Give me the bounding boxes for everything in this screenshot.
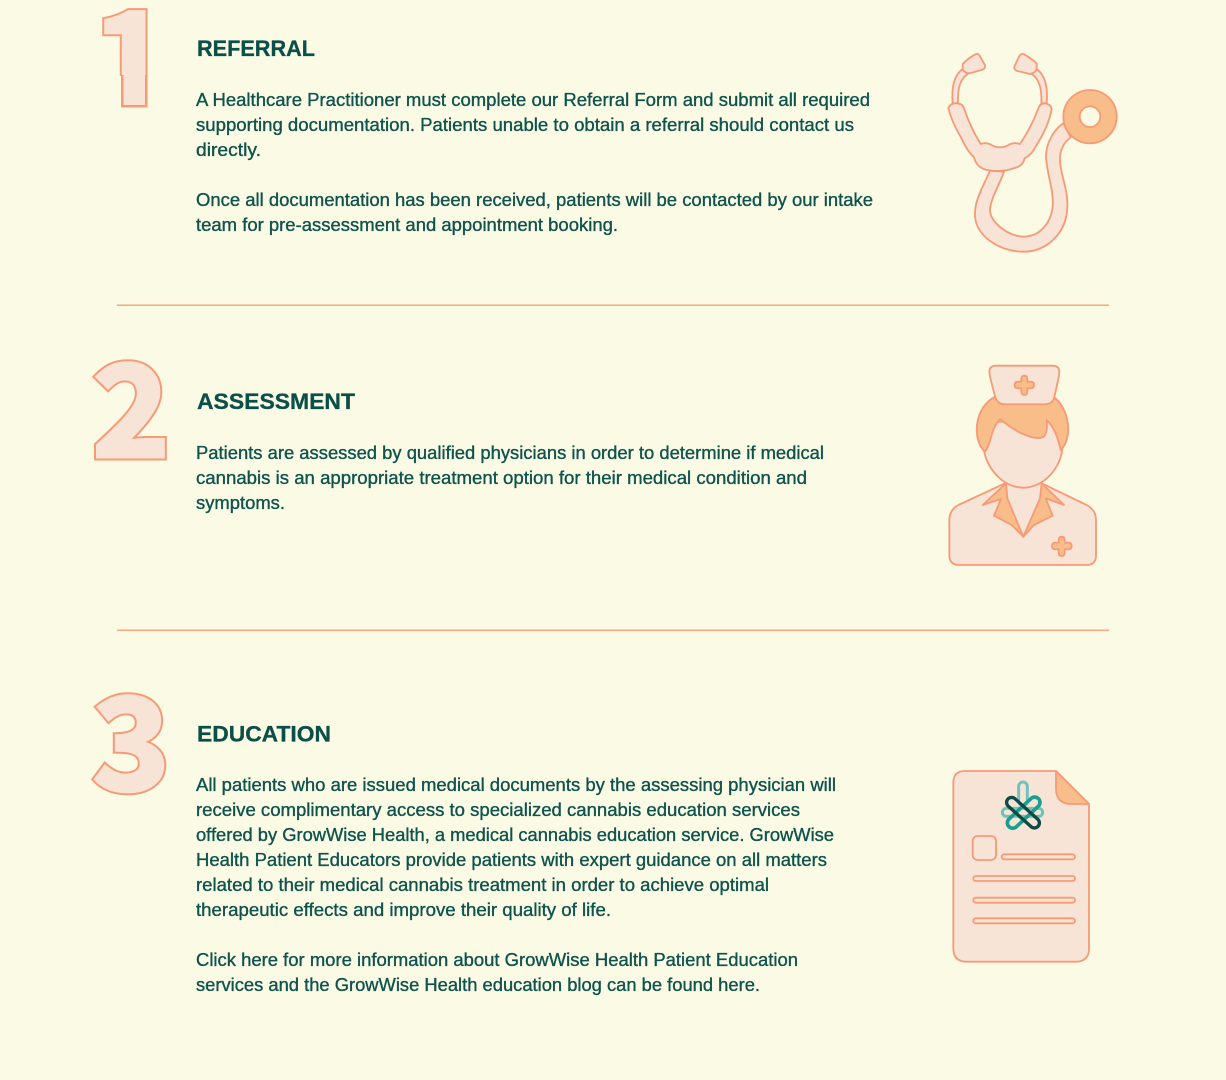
- text block: education description: related to their medical cannabis treatment in order to achieve optimal: [196, 875, 769, 895]
- panel: step 2 assessment: [91, 308, 1096, 565]
- text block: referral description: directly.: [196, 140, 261, 160]
- text block: education description: therapeutic effects and improve their quality of life.: [196, 900, 611, 920]
- text block: assessment description: cannabis is an appropriate treatment option for their medical condition and: [196, 468, 807, 488]
- text block: education description: offered by GrowWise Health, a medical cannabis education service. GrowWise: [196, 825, 834, 845]
- text block: referral description: A Healthcare Practitioner must complete our Referral Form and submit all required: [196, 90, 870, 110]
- logo: GrowWise knot: [1002, 782, 1043, 830]
- panel: step 1 referral: [92, 0, 1117, 252]
- divider 1: [117, 304, 1109, 306]
- icon: nurse: [949, 366, 1096, 565]
- number 2: 2: [91, 308, 171, 496]
- text block: assessment description: [196, 443, 824, 513]
- text block: education description: Click here for more information about GrowWise Health Patient Education: [196, 950, 798, 970]
- text block: assessment description: Patients are assessed by qualified physicians in order to determine if medical: [196, 443, 824, 463]
- text block: referral description: supporting documentation. Patients unable to obtain a referral should contact us: [196, 115, 854, 135]
- text block: referral description: team for pre-assessment and appointment booking.: [196, 215, 618, 235]
- icon: medical document: [953, 771, 1089, 962]
- text block: education description: All patients who are issued medical documents by the assessing physician will: [196, 775, 836, 795]
- text block: referral description: [196, 90, 873, 235]
- divider 2: [117, 630, 1109, 631]
- heading: referral: REFERRAL: [197, 36, 315, 61]
- number 1: [102, 8, 148, 108]
- heading: education: EDUCATION: [197, 722, 331, 746]
- number 3: 3: [91, 641, 171, 829]
- panel: step 3 education: [91, 641, 1089, 995]
- heading: assessment: ASSESSMENT: [197, 389, 355, 414]
- text block: education description: [196, 775, 836, 995]
- text block: referral description: Once all documentation has been received, patients will be contacted by our intake: [196, 190, 873, 210]
- text block: education description: receive complimentary access to specialized cannabis education services: [196, 800, 800, 820]
- number 2: 2: [91, 308, 171, 496]
- text block: education description: services and the GrowWise Health education blog can be found here.: [196, 975, 760, 995]
- text block: assessment description: symptoms.: [196, 493, 285, 513]
- icon: stethoscope: [948, 54, 1117, 252]
- text block: education description: Health Patient Educators provide patients with expert guidance on all matters: [196, 850, 827, 870]
- number 3: 3: [91, 641, 171, 829]
